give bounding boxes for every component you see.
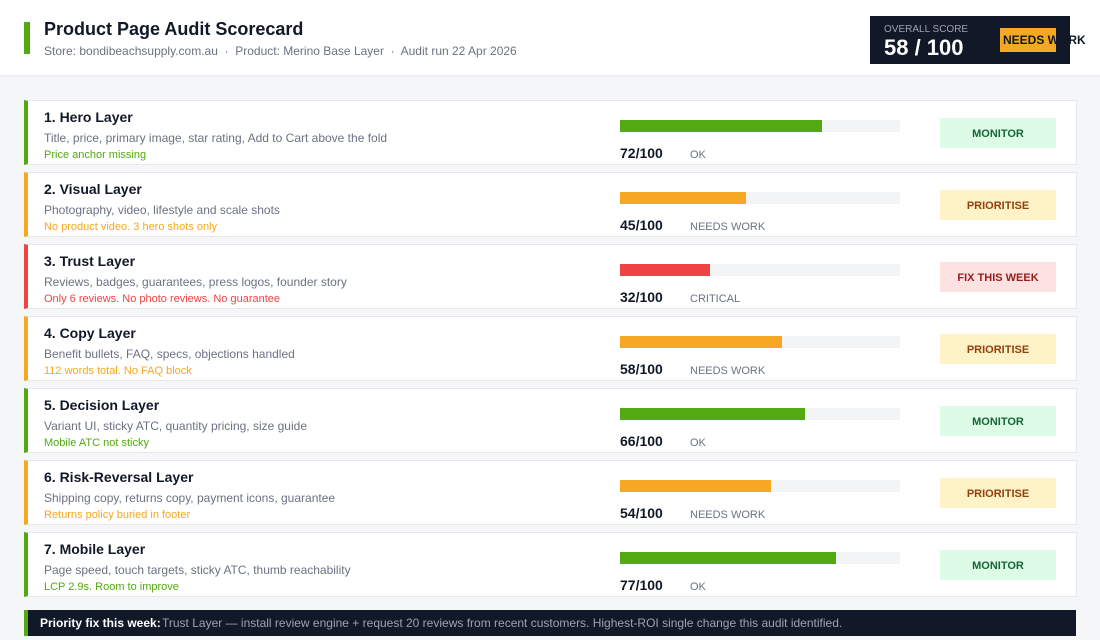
action tag: [940, 406, 1056, 436]
status: NEEDS WORK: [690, 221, 765, 233]
layer finding: Returns policy buried in footer: [44, 509, 190, 521]
needs work badge: [1000, 28, 1056, 52]
layer description: Benefit bullets, FAQ, specs, objections handled: [44, 347, 295, 361]
needs work badge: NEEDS WORK: [1003, 33, 1086, 47]
action tag: [940, 262, 1056, 292]
layer title: 2. Visual Layer: [44, 181, 142, 197]
panel: risk-reversal layer: [24, 460, 1077, 525]
score bar: [620, 192, 900, 204]
layer description: Reviews, badges, guarantees, press logos, founder story: [44, 275, 347, 289]
action tag: MONITOR: [972, 560, 1024, 572]
layer description: Variant UI, sticky ATC, quantity pricing, size guide: [44, 419, 307, 433]
status: OK: [690, 437, 706, 449]
layer title: 1. Hero Layer: [44, 109, 133, 125]
panel: decision layer: [24, 388, 1077, 453]
layer finding: LCP 2.9s. Room to improve: [44, 581, 179, 593]
score: 77/100: [620, 577, 663, 593]
layer description: Shipping copy, returns copy, payment icons, guarantee: [44, 491, 335, 505]
action tag: [940, 118, 1056, 148]
overall score label: OVERALL SCORE: [884, 24, 968, 35]
header bar: [0, 0, 1100, 77]
layer description: Title, price, primary image, star rating, Add to Cart above the fold: [44, 131, 387, 145]
status: NEEDS WORK: [690, 365, 765, 377]
action tag: PRIORITISE: [967, 344, 1029, 356]
panel: trust layer: [24, 244, 1077, 309]
layer finding: Mobile ATC not sticky: [44, 437, 149, 449]
layer description: Photography, video, lifestyle and scale shots: [44, 203, 280, 217]
panel: visual layer: [24, 172, 1077, 237]
layer finding: Only 6 reviews. No photo reviews. No guarantee: [44, 293, 280, 305]
action tag: FIX THIS WEEK: [957, 272, 1039, 284]
layer finding: No product video. 3 hero shots only: [44, 221, 217, 233]
score bar: [620, 408, 900, 420]
panel: mobile layer: [24, 532, 1077, 597]
action tag: [940, 478, 1056, 508]
layer title: 5. Decision Layer: [44, 397, 159, 413]
score: 54/100: [620, 505, 663, 521]
layer title: 6. Risk-Reversal Layer: [44, 469, 193, 485]
score: 45/100: [620, 217, 663, 233]
subtitle: Store: bondibeachsupply.com.au · Product: Merino Base Layer · Audit run 22 Apr 2026: [44, 44, 517, 58]
layer description: Page speed, touch targets, sticky ATC, thumb reachability: [44, 563, 351, 577]
action tag: PRIORITISE: [967, 200, 1029, 212]
title: Product Page Audit Scorecard: [44, 19, 303, 39]
score bar: [620, 552, 900, 564]
banner text: Trust Layer — install review engine + request 20 reviews from recent customers. Highest-ROI single change this audit identified.: [162, 616, 842, 630]
banner label: Priority fix this week:: [40, 616, 161, 630]
score bar: [620, 480, 900, 492]
action tag: [940, 334, 1056, 364]
score bar: [620, 336, 900, 348]
action tag: [940, 190, 1056, 220]
priority fix banner: [24, 610, 1076, 636]
layer title: 7. Mobile Layer: [44, 541, 145, 557]
status: CRITICAL: [690, 293, 740, 305]
score: 66/100: [620, 433, 663, 449]
layer finding: 112 words total. No FAQ block: [44, 365, 192, 377]
accent bar: [24, 22, 30, 54]
score bar: [620, 120, 900, 132]
status: NEEDS WORK: [690, 509, 765, 521]
status: OK: [690, 149, 706, 161]
layer title: 3. Trust Layer: [44, 253, 135, 269]
action tag: PRIORITISE: [967, 488, 1029, 500]
overall score value: 58 / 100: [884, 35, 964, 60]
action tag: MONITOR: [972, 128, 1024, 140]
action tag: [940, 550, 1056, 580]
status: OK: [690, 581, 706, 593]
panel: hero layer: [24, 100, 1077, 165]
score: 72/100: [620, 145, 663, 161]
panel: copy layer: [24, 316, 1077, 381]
layer title: 4. Copy Layer: [44, 325, 136, 341]
layer finding: Price anchor missing: [44, 149, 146, 161]
score: 32/100: [620, 289, 663, 305]
action tag: MONITOR: [972, 416, 1024, 428]
score bar: [620, 264, 900, 276]
overall score box: [870, 16, 1070, 64]
score: 58/100: [620, 361, 663, 377]
